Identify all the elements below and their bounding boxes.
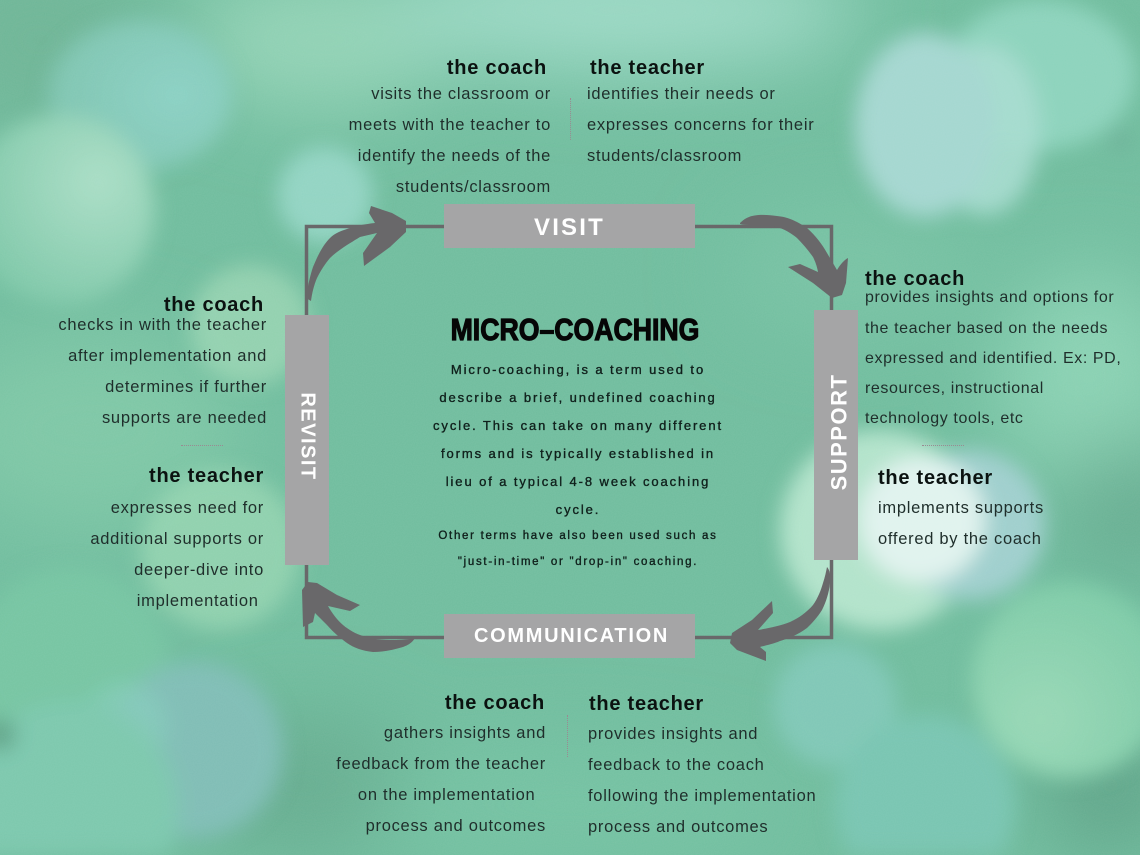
support: coach text: the teacher based on the needs <box>865 320 1108 337</box>
box: support <box>814 310 858 560</box>
central description: other terms <box>438 530 718 568</box>
revisit: coach text: checks in with the teacher <box>58 316 267 334</box>
communication: coach text: feedback from the teacher <box>336 755 546 773</box>
support: coach heading: the coach <box>865 268 965 290</box>
revisit: coach text <box>58 316 267 427</box>
box: revisit <box>285 315 329 565</box>
visit: teacher text <box>587 85 814 165</box>
central description: forms and is typically established in <box>441 446 715 461</box>
visit: coach text: meets with the teacher to <box>349 116 551 134</box>
lower-right blob trimmed to the page edge <box>835 715 1015 855</box>
cycle frame <box>306 226 832 638</box>
visit: coach text: students/classroom <box>396 178 551 196</box>
box: support: SUPPORT <box>826 374 851 490</box>
revisit: teacher text: deeper-dive into <box>134 561 264 579</box>
revisit: teacher text: additional supports or <box>90 530 264 548</box>
box: revisit: REVISIT <box>297 392 319 480</box>
support: teacher heading: the teacher <box>878 467 993 489</box>
visit: teacher text: identifies their needs or <box>587 85 776 103</box>
central description: other terms: "just-in-time" or "drop-in" coaching. <box>458 556 698 568</box>
box: communication <box>444 614 695 658</box>
communication: coach text: process and outcomes <box>366 817 546 835</box>
support: coach text: resources, instructional <box>865 380 1044 397</box>
visit: teacher text: students/classroom <box>587 147 742 165</box>
revisit: coach text: after implementation and <box>68 347 267 365</box>
revisit: coach heading: the coach <box>164 294 264 316</box>
support: teacher text: offered by the coach <box>878 530 1042 548</box>
communication: coach heading: the coach <box>445 692 545 714</box>
box: visit: VISIT <box>534 214 605 241</box>
visit: coach text: visits the classroom or <box>371 85 551 103</box>
arrow: visit to support <box>740 215 848 298</box>
revisit: teacher text: implementation <box>137 592 259 610</box>
visit: teacher heading: the teacher <box>590 57 705 79</box>
central description: lieu of a typical 4-8 week coaching <box>446 474 710 489</box>
communication: teacher text: process and outcomes <box>588 818 768 836</box>
central description: other terms: Other terms have also been used such as <box>438 530 718 542</box>
title: MICRO–COACHING <box>451 312 699 347</box>
visit: coach text: identify the needs of the <box>358 147 551 165</box>
box: visit <box>444 204 695 248</box>
central description <box>433 362 723 517</box>
communication: teacher text: following the implementation <box>588 787 816 805</box>
communication: teacher heading: the teacher <box>589 693 704 715</box>
visit: coach heading: the coach <box>447 57 547 79</box>
central description: cycle. This can take on many different <box>433 418 723 433</box>
central description: describe a brief, undefined coaching <box>439 390 717 405</box>
revisit: teacher text: expresses need for <box>111 499 264 517</box>
box: communication: COMMUNICATION <box>474 624 669 646</box>
revisit: coach text: supports are needed <box>102 409 267 427</box>
communication: teacher text: provides insights and <box>588 725 758 743</box>
visit: coach text <box>349 85 551 196</box>
central description: Micro-coaching, is a term used to <box>451 362 705 377</box>
central description: cycle. <box>556 502 600 517</box>
support: coach text: expressed and identified. Ex: PD, <box>865 350 1121 367</box>
communication: teacher text <box>588 725 816 836</box>
revisit: coach text: determines if further <box>105 378 267 396</box>
visit: teacher text: expresses concerns for their <box>587 116 814 134</box>
lower-left blob trimmed to the page edge <box>0 702 178 855</box>
communication: coach text: on the implementation <box>358 786 535 804</box>
communication: coach text: gathers insights and <box>384 724 546 742</box>
communication: teacher text: feedback to the coach <box>588 756 765 774</box>
support: coach text: technology tools, etc <box>865 410 1023 427</box>
support: teacher text <box>878 499 1044 548</box>
support: coach text: provides insights and options for <box>865 289 1114 306</box>
support: coach text <box>865 289 1121 427</box>
communication: coach text <box>336 724 546 835</box>
arrow: communication to revisit <box>302 582 415 652</box>
revisit: teacher heading: the teacher <box>149 465 264 487</box>
arrow: revisit to visit <box>306 206 406 301</box>
arrow: support to communication <box>730 567 830 661</box>
support: teacher text: implements supports <box>878 499 1044 517</box>
revisit: teacher text <box>90 499 264 610</box>
